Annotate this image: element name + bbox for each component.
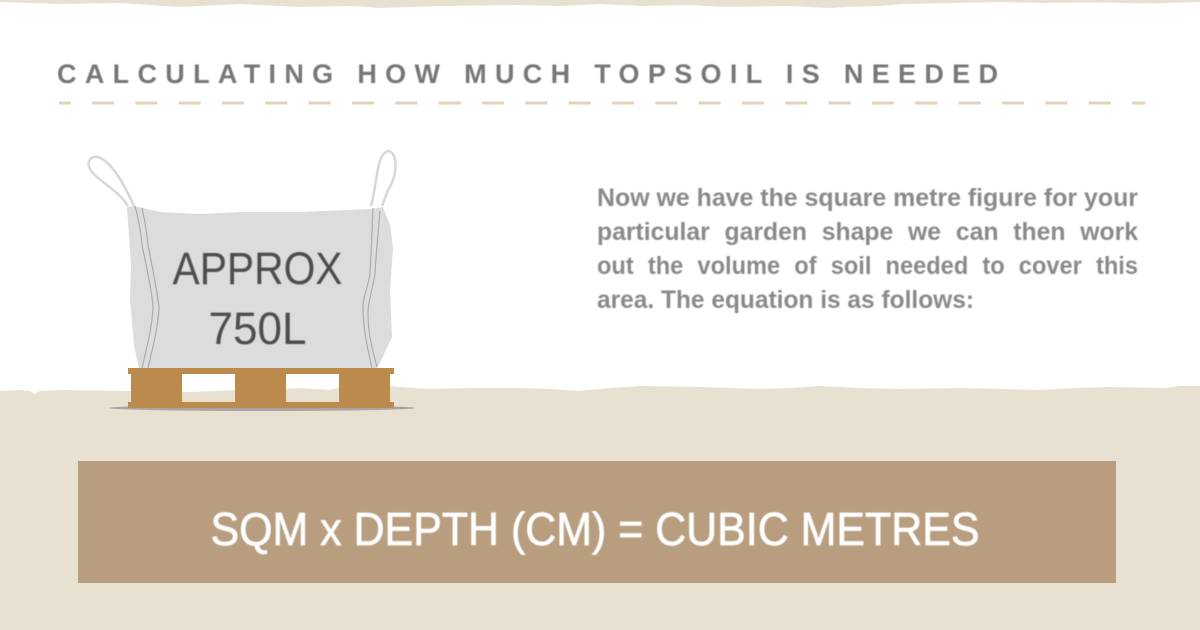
paragraph: Now we have the square metre figure for your	[597, 184, 1138, 212]
paragraph: out the volume of soil needed to cover this	[597, 252, 1138, 280]
torn ground background	[0, 386, 1200, 630]
bag body	[127, 206, 393, 369]
paragraph	[597, 184, 1138, 314]
paragraph: particular garden shape we can then work	[597, 218, 1138, 246]
equation panel	[78, 461, 1116, 583]
pallet shadow	[109, 405, 415, 411]
equation text: SQM x DEPTH (CM) = CUBIC METRES	[210, 503, 980, 555]
torn strip: top edge	[0, 0, 1200, 8]
pallet	[128, 368, 394, 408]
bag seams	[135, 206, 380, 368]
dashed divider	[59, 102, 1145, 104]
bag label: APPROX	[172, 243, 342, 294]
paragraph: area. The equation is as follows:	[597, 286, 974, 314]
bag handles	[89, 151, 395, 206]
icon: topsoil bulk bag on pallet	[89, 151, 415, 411]
heading: CALCULATING HOW MUCH TOPSOIL IS NEEDED	[57, 59, 998, 89]
bag volume: 750L	[208, 303, 306, 354]
